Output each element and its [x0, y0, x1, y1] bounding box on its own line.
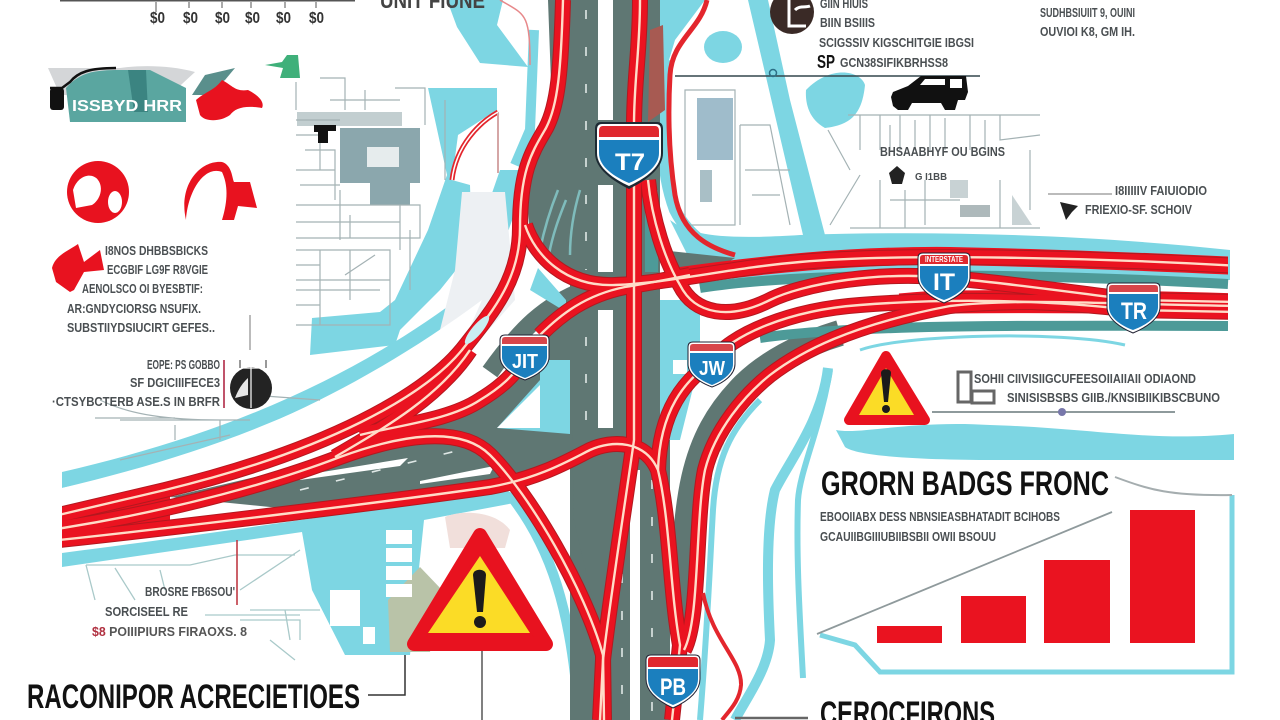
large warning sign — [414, 535, 546, 720]
text block: warning notes — [932, 372, 1220, 416]
text block: top right: SUDHBSIUIIT 9, OUINI — [1040, 6, 1135, 20]
top centre text block with icon — [770, 0, 974, 72]
text block: bottom left: SORCISEEL RE — [105, 605, 188, 619]
interstate shield: far right: TR — [1121, 298, 1147, 325]
text block: left: AR:GNDYCIORSG NSUFIX. — [67, 302, 201, 316]
road oval cutout — [462, 313, 492, 347]
pale highlight areas — [62, 192, 515, 652]
icon: star marker — [889, 166, 905, 184]
text block: left — [67, 244, 215, 335]
heading: bottom left: RACONIPOR ACRECIETIOES — [27, 678, 360, 716]
grey carriageways — [170, 0, 840, 720]
text block: map centre: G I1BB — [915, 172, 947, 183]
text block: left: ECGBIF LG9F R8VGIE — [107, 263, 208, 277]
street map: right district — [675, 70, 1040, 228]
text block: left lower: SF DGICIIIFECE3 — [130, 376, 220, 390]
small warning sign — [849, 356, 925, 420]
text block: map right — [1048, 184, 1207, 220]
interstate shield: bottom — [646, 655, 700, 708]
text block: left: SUBSTIIYDSIUCIRT GEFES.. — [67, 321, 215, 335]
top axis: $0 — [245, 10, 260, 27]
top axis: $0 — [215, 10, 230, 27]
icon: dark brown badge — [770, 0, 814, 34]
street map: lower left district — [86, 395, 412, 660]
top centre text block with icon: GCN38SIFIKBRHSS8 — [840, 56, 948, 70]
icon: black badge — [230, 355, 272, 409]
interstate shield: top centre: T7 — [615, 149, 645, 176]
icon: red blob — [52, 244, 104, 292]
text block: warning notes: SOHII CIIVISIIGCUFEESOIIAIIAII ODIAOND — [974, 372, 1196, 386]
interstate shield: centre right — [688, 342, 735, 387]
interstate shield: centre left: JIT — [512, 351, 538, 373]
text block: map right: FRIEXIO-SF. SCHOIV — [1085, 203, 1193, 217]
teal road shoulders — [700, 275, 1228, 338]
top centre text block with icon: SCIGSSIV KIGSCHITGIE IBGSI — [819, 36, 974, 50]
chart heading: GRORN BADGS FRONC — [821, 465, 1109, 503]
text block: bottom left: BROSRE FB6SOU' — [145, 585, 235, 599]
top centre text block with icon: SP — [817, 52, 835, 72]
chart description: EBOOIIABX DESS NBNSIEASBHATADIT BCIHOBS — [820, 510, 1060, 524]
text block: map centre — [880, 145, 1005, 184]
text block: top right: OUVIOI K8, GM IH. — [1040, 25, 1135, 39]
top axis: $0 — [150, 10, 165, 27]
top axis: $0 — [183, 10, 198, 27]
chart description — [820, 510, 1060, 544]
chart description: GCAUIIBGIIIUBIIBSBII OWII BSOUU — [820, 530, 996, 544]
icon: teal vehicle badge — [48, 55, 300, 122]
text block: left lower — [52, 358, 224, 409]
text block: bottom left: $8 POIIIPIURS FIRAOXS. 8 — [92, 625, 247, 639]
text block: warning notes: SINISISBSBS GIIB./KNSIBIIKIBSCBUNO — [1007, 391, 1220, 405]
interstate shield: right upper: IT — [933, 269, 955, 296]
vertical rule: left — [249, 315, 251, 350]
text block: map right: I8IIIIIV FAIUIODIO — [1115, 184, 1207, 198]
median strips and side cuts — [598, 0, 687, 720]
bar chart — [817, 477, 1232, 643]
top axis: $0 — [276, 10, 291, 27]
icon: black car — [891, 76, 968, 110]
interstate shield: centre left — [500, 335, 549, 380]
interstate shield: bottom: PB — [660, 674, 686, 701]
text block: top right — [1040, 6, 1135, 39]
text block: left: I8NOS DHBBSBICKS — [105, 244, 208, 258]
top axis: $0 — [309, 10, 324, 27]
icon: small map marker — [314, 125, 336, 143]
top centre text block with icon: BIIN BSIIIS — [820, 16, 875, 30]
street map: left district — [296, 78, 445, 325]
text block: left: AENOLSCO OI BYESBTIF: — [82, 282, 203, 296]
text block: bottom left — [92, 540, 247, 639]
interstate shield: right upper — [918, 253, 970, 303]
text block: left lower: ·CTSYBCTERB ASE.S IN BRFR — [52, 395, 220, 409]
interstate shield: far right — [1107, 283, 1160, 333]
interstate shield: right upper: INTERSTATE — [925, 255, 964, 264]
water: thin cyan channels — [510, 30, 1232, 720]
inner islands between carriageways — [298, 190, 580, 484]
icon: red curved symbol — [184, 162, 257, 220]
lane markings — [300, 10, 780, 720]
red thin service roads — [452, 0, 741, 720]
text block: left lower: EOPE: PS GOBBO — [147, 358, 220, 372]
interstate shield: top centre — [595, 122, 663, 189]
text block: map centre: BHSAABHYF OU BGINS — [880, 145, 1005, 159]
leader line: bottom right — [735, 717, 808, 719]
icon: red circle — [67, 161, 129, 223]
icon: teal vehicle badge: ISSBYD HRR — [72, 98, 182, 115]
top axis — [60, 0, 355, 27]
leader line: bottom left — [368, 655, 405, 695]
interstate shield: centre right: JW — [699, 358, 725, 380]
